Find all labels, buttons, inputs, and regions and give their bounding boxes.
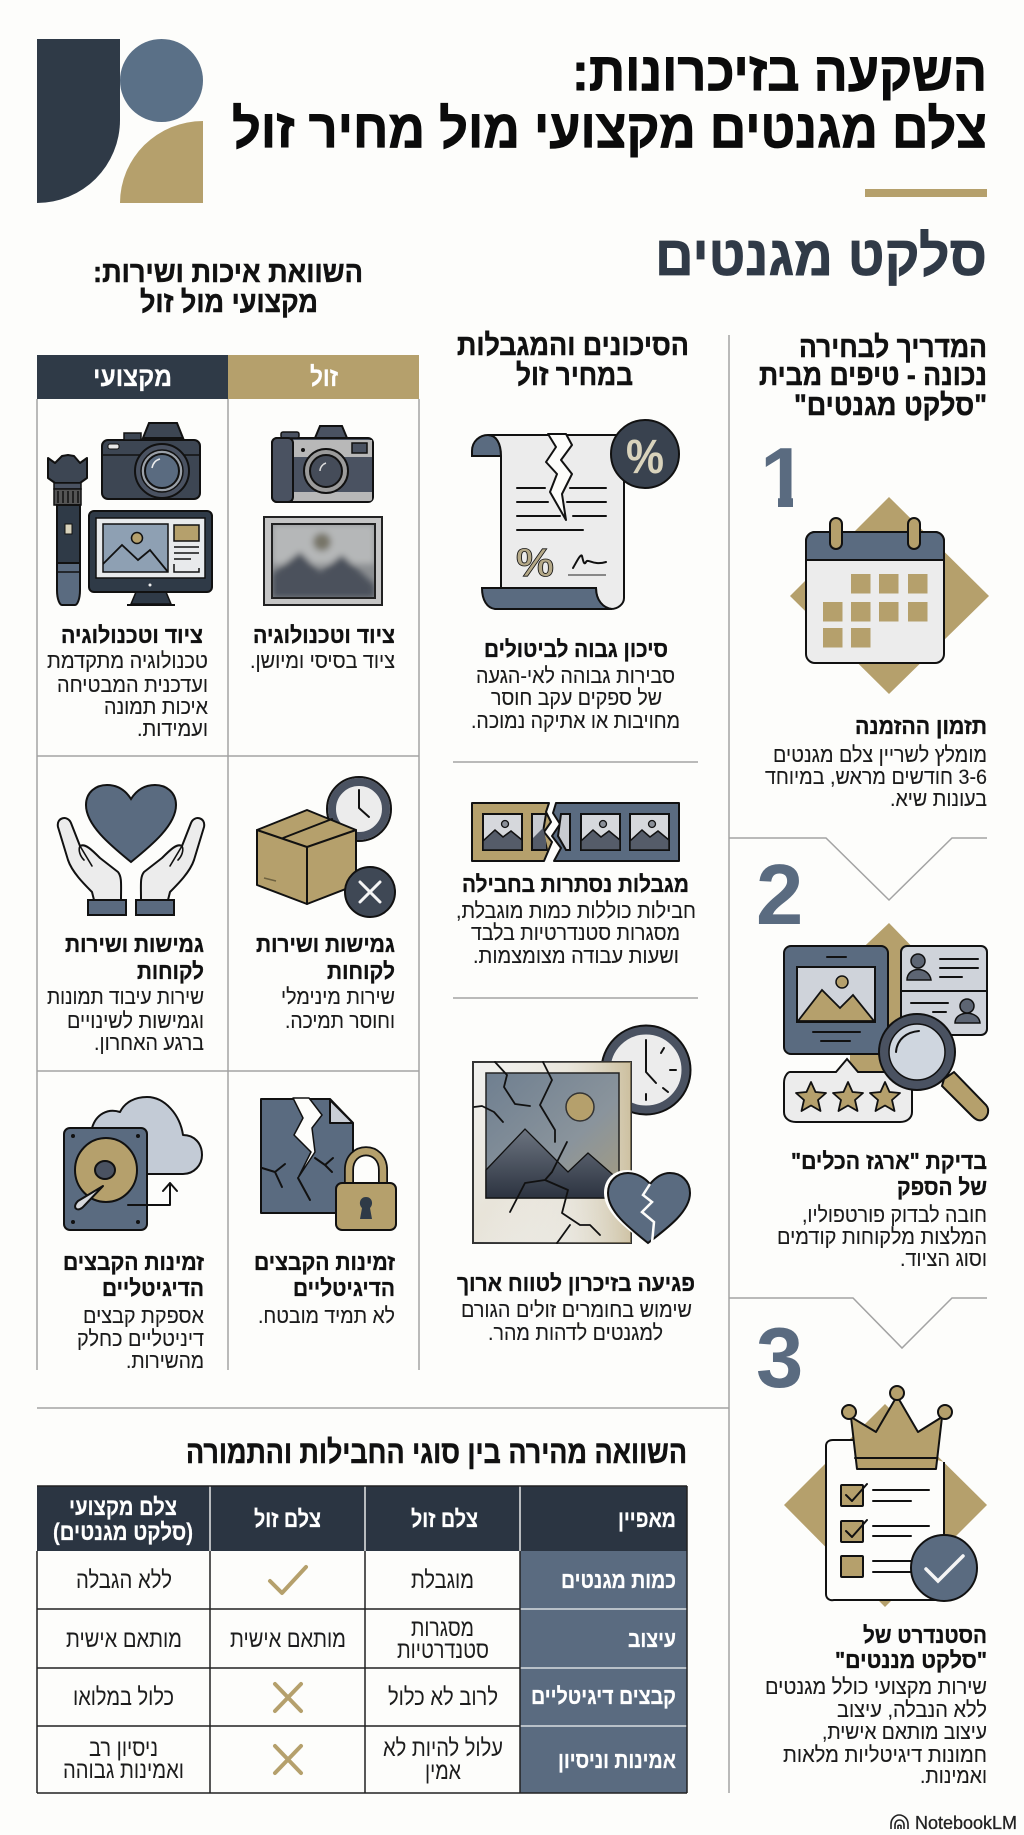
professional files text: זמינות הקבצים [63, 1249, 205, 1275]
risk 3 text [457, 1270, 695, 1345]
table header row: צלם מקצועי [69, 1494, 177, 1521]
professional files text: הדיגיטליים [102, 1275, 204, 1301]
icon: torn contract: % [516, 541, 554, 585]
cheap column one: עלול להיות לא [383, 1735, 503, 1762]
professional column: מותאם אישית [66, 1626, 182, 1653]
custom design value: מותאם אישית [230, 1626, 346, 1653]
icon: cross mark second [275, 1746, 301, 1773]
step 3 text: עיצוב מותאם אישית, [822, 1720, 987, 1744]
table header row: (סלקט מגנטים) [53, 1519, 193, 1546]
panel: quality comparison [37, 256, 419, 1373]
professional equipment text [47, 622, 208, 741]
title [232, 42, 987, 159]
step 2 text: בדיקת "ארגז הכלים" [791, 1148, 987, 1174]
cheap column one: סטנדרטיות [397, 1637, 489, 1664]
feature column [520, 1551, 687, 1793]
panel: risks and limits [453, 329, 698, 1345]
icon: cross mark [275, 1684, 301, 1711]
professional column: כלול במלואו [73, 1684, 174, 1711]
cheap column one: מסגרות [411, 1615, 474, 1642]
guide heading: נכונה - טיפים מבית [759, 359, 987, 392]
risk 2 text: ושעות עבודה מצומצמות. [473, 944, 679, 968]
professional equipment text: ציוד וטכנולוגיה [61, 622, 203, 648]
table header row: צלם זול [411, 1506, 478, 1533]
professional service text: לקוחות [137, 958, 204, 984]
cheap equipment text [250, 622, 395, 673]
arrow divider 2 to 3 [729, 1298, 987, 1348]
icon: torn contract: % [626, 431, 664, 484]
guide heading: "סלקט מגנטים" [794, 389, 987, 422]
step 2 text [777, 1148, 987, 1271]
NotebookLM watermark: NotebookLM [915, 1813, 1017, 1833]
comparison heading: מקצועי מול זול [140, 286, 318, 319]
cheap service text: שירות מינימלי [281, 985, 395, 1009]
professional equipment text: ועמידות. [137, 717, 208, 741]
cheap column one: מוגבלת [411, 1567, 474, 1594]
risk 2 text [456, 871, 696, 968]
table header row: צלם זול [254, 1506, 321, 1533]
table header row: מאפיין [618, 1506, 676, 1533]
professional equipment text: טכנולוגיה מתקדמת [47, 649, 208, 673]
column header: professional: מקצועי [93, 362, 172, 392]
risk 2 text: מגבלות נסתרות בחבילה [462, 871, 689, 897]
risk 1 text: סיכון גבוה לביטולים [484, 636, 668, 662]
step 2 text: המלצות מלקוחות קודמים [777, 1225, 987, 1249]
column header: cheap [228, 355, 419, 399]
professional service text [47, 931, 204, 1055]
cheap service text: וחוסר תמיכה. [285, 1009, 395, 1033]
title: השקעה בזיכרונות: [572, 42, 987, 102]
professional files text: דיניטליים כחלק [77, 1327, 204, 1351]
professional column: ואמינות גבוהה [63, 1757, 184, 1784]
cheap service text [256, 931, 395, 1033]
feature column: אמינות וניסיון [558, 1747, 676, 1773]
step 1 text: בעונות שיא. [890, 787, 987, 811]
professional column: ניסיון רב [89, 1735, 158, 1762]
cheap service text: לקוחות [327, 958, 395, 984]
icon: calendar [790, 497, 989, 694]
guide heading: המדריך לבחירה [799, 331, 987, 364]
icon: check mark [270, 1567, 306, 1593]
cheap files text: זמינות הקבצים [254, 1249, 396, 1275]
cheap files text: לא תמיד מובטח. [258, 1304, 395, 1328]
step 2 text: של הספק [897, 1174, 987, 1200]
step number 2: 2 [756, 848, 803, 943]
logo [37, 39, 203, 203]
cheap column one: לרוב לא כלול [388, 1684, 498, 1711]
arrow divider 1 to 2 [729, 838, 987, 900]
step 2 text: וסוג הציוד. [900, 1247, 987, 1271]
step 3 text: ללא הנבלה, עיצוב [837, 1698, 987, 1722]
cheap column one: אמין [425, 1758, 461, 1785]
cheap service text: גמישות ושירות [256, 931, 395, 957]
comparison heading: השוואת איכות ושירות: [93, 256, 363, 289]
comparison table [37, 1486, 687, 1793]
cheap files text [254, 1249, 396, 1328]
risk 3 text: למגנטים לדהות מהר. [488, 1321, 663, 1345]
professional service text: וגמישות לשינויים [67, 1009, 204, 1033]
step 3 text [765, 1622, 987, 1788]
icon: box, clock and cross [257, 777, 395, 917]
icon: torn contract [472, 420, 679, 609]
accent bar [865, 189, 987, 197]
guide heading [759, 331, 987, 422]
icon: faded cracked photo [473, 1026, 694, 1245]
step 1 text [765, 713, 987, 811]
step number 3: 3 [756, 1311, 803, 1406]
cheap equipment text: ציוד וטכנולוגיה [253, 622, 395, 648]
risk 3 text: שימוש בחומרים זולים הגורם [461, 1298, 692, 1322]
risks heading [457, 329, 689, 392]
icon: professional camera, lens and monitor [48, 423, 212, 605]
guide column line [728, 335, 730, 1793]
brand name: סלקט מגנטים [655, 224, 987, 287]
column header: professional [37, 355, 228, 399]
step 3 text: "סלקט מננטים" [835, 1647, 987, 1673]
risks heading: הסיכונים והמגבלות [457, 329, 689, 362]
step 1 text: תזמון ההזמנה [855, 713, 987, 739]
table heading: השוואה מהירה בין סוגי החבילות והתמורה [186, 1434, 687, 1470]
cheap files text: הדיגיטליים [293, 1275, 395, 1301]
professional column [63, 1567, 184, 1784]
icon: basic camera and blurry photo [264, 426, 382, 605]
icon: torn film strip [472, 803, 679, 861]
step number 1: 1 [760, 431, 807, 526]
step 1 text: מומלץ לשריין צלם מגנטים [773, 743, 987, 767]
panel: quick package comparison [37, 1434, 687, 1793]
feature column: כמות מגנטים [561, 1567, 676, 1593]
icon: crown and checklist [784, 1386, 987, 1607]
professional files text [63, 1249, 205, 1373]
cheap column two [230, 1567, 346, 1773]
risks heading: במחיר זול [516, 359, 633, 392]
risk 2 text: חבילות כוללות כמות מוגבלת, [456, 899, 696, 923]
step 3 text: חמונות דיגיטליות מלאות [783, 1743, 987, 1767]
panel: guide to choosing [729, 331, 989, 1793]
cheap column one [383, 1567, 503, 1785]
professional service text: שירות עיבוד תמונות [47, 985, 204, 1009]
icon: portfolio and reviews [784, 923, 988, 1122]
feature column: קבצים דיגיטליים [531, 1683, 676, 1709]
step 2 text: חובה לבדוק פורטפוליו, [802, 1203, 987, 1227]
comparison heading [93, 256, 363, 319]
table header row [37, 1486, 687, 1551]
professional files text: אספקת קבצים [83, 1304, 204, 1328]
risk 1 text: סבירות גבוהה לאי-הגעה [476, 664, 675, 688]
step 3 text: הסטנדרט של [863, 1622, 987, 1648]
icon: hard drive and cloud [64, 1097, 202, 1230]
icon: broken file and padlock [261, 1098, 396, 1230]
title: צלם מגנטים מקצועי מול מחיר זול [232, 99, 987, 159]
step 3 text: שירות מקצועי כולל מגנטים [765, 1675, 987, 1699]
professional column: ללא הגבלה [76, 1567, 172, 1594]
column header: cheap: זול [310, 362, 338, 392]
professional files text: מהשירות. [126, 1349, 204, 1373]
risk 1 text [471, 636, 680, 733]
risk 1 text: של ספקים עקב חוסר [491, 686, 662, 710]
step 1 text: 3-6 חודשים מראש, במיוחד [765, 765, 987, 789]
icon: hands holding heart [58, 785, 204, 915]
risk 2 text: מסגרות סטנדרטיות בלבד [471, 921, 680, 945]
professional equipment text: ועדכנית המבטיחה [57, 673, 208, 697]
risk 3 text: פגיעה בזיכרון לטווח ארוך [457, 1270, 695, 1296]
professional service text: ברגע האחרון. [94, 1031, 204, 1055]
cheap equipment text: ציוד בסיסי ומיושן. [250, 649, 395, 673]
step 3 text: ואמינות. [920, 1764, 987, 1788]
professional service text: גמישות ושירות [65, 931, 204, 957]
risk 1 text: מחויבות או אתיקה נמוכה. [471, 709, 680, 733]
feature column: עיצוב [628, 1626, 676, 1652]
professional equipment text: איכות תמונה [104, 695, 208, 719]
